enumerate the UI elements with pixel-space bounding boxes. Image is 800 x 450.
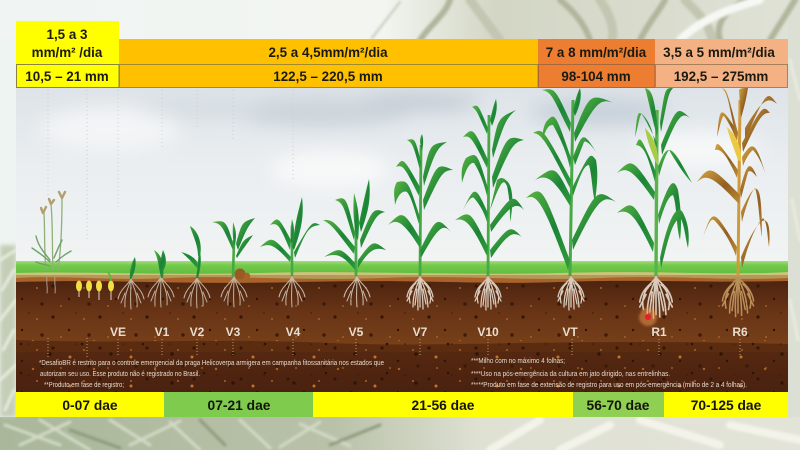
period 07-21 bbox=[164, 392, 313, 417]
stage labels: V4 bbox=[286, 325, 301, 339]
plant: V7 bbox=[388, 134, 453, 310]
stage labels: V10 bbox=[477, 325, 499, 339]
header: water demand per stage bbox=[16, 21, 788, 88]
stage labels: VE bbox=[110, 325, 126, 339]
plant: VT bbox=[526, 88, 616, 310]
panel: crop growth scene bbox=[16, 88, 788, 392]
footnotes left bbox=[39, 358, 384, 389]
stage labels: V7 bbox=[413, 325, 428, 339]
column: 0-07 dae bbox=[16, 21, 119, 88]
soil layers bbox=[16, 272, 788, 392]
stage labels: V2 bbox=[190, 325, 205, 339]
column: 0-07 dae: 1,5 a 3 bbox=[47, 27, 87, 42]
stage labels bbox=[48, 325, 748, 357]
column: 07-56 dae: 2,5 a 4,5mm/m²/dia bbox=[268, 45, 388, 60]
plant: V1 bbox=[148, 250, 174, 307]
period 56-70: 56-70 dae bbox=[587, 398, 650, 413]
plant: VE bbox=[118, 257, 144, 309]
marker: red dot bbox=[639, 308, 657, 326]
column: 56-70 dae: 7 a 8 mm/m²/dia bbox=[546, 45, 647, 60]
footnotes left: *DesafioBR é restrito para o controle emergencial da praga Helicoverpa armigera em campanha fitossanitária nos estados que bbox=[39, 358, 384, 367]
period 70-125 bbox=[664, 392, 788, 417]
column: 56-70 dae bbox=[538, 39, 655, 88]
plant: V10 bbox=[455, 99, 524, 310]
period 70-125: 70-125 dae bbox=[691, 398, 762, 413]
stage labels: V3 bbox=[226, 325, 241, 339]
period 56-70 bbox=[573, 392, 664, 417]
stage labels: V1 bbox=[155, 325, 170, 339]
plant: V2 bbox=[181, 226, 210, 308]
plant: weed bbox=[32, 192, 71, 293]
column: 07-56 dae bbox=[119, 39, 538, 88]
column: 70-125 dae bbox=[655, 39, 788, 88]
plant: V5 bbox=[323, 179, 386, 307]
stage labels: R1 bbox=[651, 325, 667, 339]
stage labels: R6 bbox=[732, 325, 748, 339]
column: 56-70 dae: 98-104 mm bbox=[561, 69, 631, 84]
grass strip bbox=[16, 261, 788, 276]
footnotes right: *****Produto em fase de extensão de registro para uso em pós-emergência (milho de 2 a 4 folhas). bbox=[471, 380, 747, 389]
stage labels: V5 bbox=[349, 325, 364, 339]
sky with clouds bbox=[16, 88, 788, 263]
footnotes right: ***Milho com no máximo 4 folhas; bbox=[471, 356, 565, 365]
column: 0-07 dae: mm/m² /dia bbox=[32, 45, 103, 60]
plant: R6 bbox=[697, 88, 777, 317]
timeline: days after emergence bbox=[16, 392, 788, 417]
footnotes left: autorizam seu uso. Esse produto não é registrado no Brasil. bbox=[40, 369, 200, 378]
column: 70-125 dae: 192,5 – 275mm bbox=[674, 69, 768, 84]
footnotes left: **Produto em fase de registro; bbox=[44, 380, 124, 389]
period 0-07: 0-07 dae bbox=[62, 398, 118, 413]
stage labels: VT bbox=[562, 325, 578, 339]
footnotes right: ****Uso na pós-emergência da cultura em jato dirigido, nas entrelinhas. bbox=[471, 369, 670, 378]
plant: V4 bbox=[260, 197, 320, 307]
seeds bbox=[76, 272, 114, 300]
period 07-21: 07-21 dae bbox=[208, 398, 271, 413]
column: 0-07 dae: 10,5 – 21 mm bbox=[25, 69, 109, 84]
plant: V3 bbox=[212, 218, 255, 307]
plant: R1 bbox=[617, 88, 692, 326]
footnotes right bbox=[471, 356, 747, 389]
period 21-56: 21-56 dae bbox=[412, 398, 475, 413]
period 21-56 bbox=[313, 392, 573, 417]
column: 07-56 dae: 122,5 – 220,5 mm bbox=[273, 69, 383, 84]
column: 70-125 dae: 3,5 a 5 mm/m²/dia bbox=[663, 45, 775, 60]
period 0-07 bbox=[16, 392, 164, 417]
